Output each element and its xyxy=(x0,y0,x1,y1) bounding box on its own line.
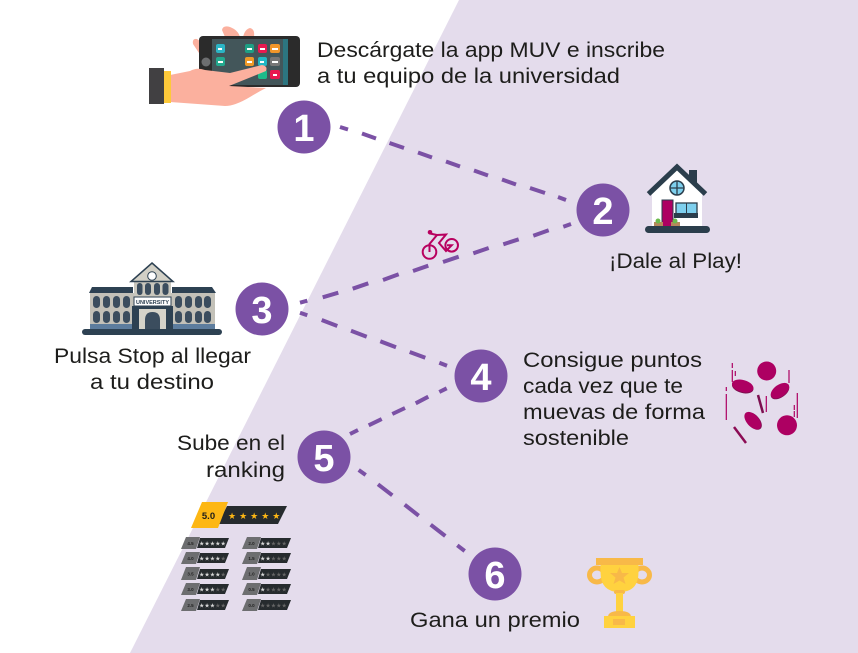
top rating 5.0: ★★★★★ xyxy=(228,511,283,521)
text: step 5: Sube en el xyxy=(177,431,285,455)
ratings left column: ★★★★★ xyxy=(199,586,226,594)
text: step 1 xyxy=(317,38,665,88)
step 4 badge xyxy=(454,350,508,402)
step 2 badge xyxy=(576,184,630,236)
icon: house xyxy=(645,167,710,233)
ranking chart xyxy=(181,502,291,611)
text: step 4: sostenible xyxy=(523,426,629,450)
icon: university building: UNIVERSITY xyxy=(136,300,169,306)
text: step 6: Gana un premio xyxy=(410,608,580,632)
dashed connector 3 to 4 xyxy=(300,313,447,366)
step 4 badge: 4 xyxy=(470,357,492,399)
text: step 2: ¡Dale al Play! xyxy=(609,249,742,273)
text: step 3 xyxy=(54,344,251,394)
step 6 badge xyxy=(468,548,522,600)
dashed connector 5 to 6 xyxy=(359,470,465,551)
ratings right column: ★★★★★ xyxy=(260,586,287,594)
ratings left column: 4.5 xyxy=(187,541,194,546)
icon: falling coins xyxy=(726,362,797,443)
ratings right column: 0.5 xyxy=(248,587,255,592)
ratings right column: ★★★★★ xyxy=(260,602,287,610)
text: step 4: cada vez que te xyxy=(523,374,683,398)
step 1 badge xyxy=(278,100,330,154)
ratings right column: 2.0 xyxy=(248,541,255,546)
text: step 3: Pulsa Stop al llegar xyxy=(54,344,251,368)
top rating 5.0 xyxy=(191,502,287,528)
ratings left column: ★★★★★ xyxy=(199,572,226,578)
step 2 badge: 2 xyxy=(592,191,614,233)
text: step 4: Consigue puntos xyxy=(523,348,702,372)
ratings right column: 1.0 xyxy=(248,572,255,576)
step 3 badge: 3 xyxy=(251,290,273,332)
ratings left column: ★★★★★ xyxy=(199,602,226,610)
dashed connector 4 to 5 xyxy=(350,388,447,434)
step 1 badge: 1 xyxy=(293,108,315,150)
top rating 5.0: 5.0 xyxy=(202,511,215,522)
step 3 badge xyxy=(236,282,288,336)
icon: university building xyxy=(82,263,222,335)
ratings left column: 3.5 xyxy=(187,572,194,576)
text: step 3: a tu destino xyxy=(90,370,214,394)
text: step 4 xyxy=(523,348,705,450)
ratings left column: ★★★★★ xyxy=(199,556,226,562)
ratings left column xyxy=(181,537,229,611)
text: step 1: Descárgate la app MUV e inscribe xyxy=(317,38,665,62)
ratings left column: 4.0 xyxy=(187,556,194,561)
step 6 badge: 6 xyxy=(484,555,506,597)
step 5 badge xyxy=(298,430,350,484)
ratings right column: 1.5 xyxy=(248,556,255,561)
step 5 badge: 5 xyxy=(313,438,335,480)
ratings right column: 0.0 xyxy=(248,603,255,608)
ratings left column: ★★★★★ xyxy=(199,540,226,548)
text: step 5 xyxy=(177,431,285,482)
icon: hand holding phone xyxy=(149,26,300,106)
ratings right column xyxy=(242,537,291,611)
icon: trophy xyxy=(590,558,650,628)
ratings right column: ★★★★★ xyxy=(260,540,287,548)
ratings right column: ★★★★★ xyxy=(260,572,287,578)
dashed connector 2 to 3 xyxy=(300,224,571,303)
text: step 1: a tu equipo de la universidad xyxy=(317,64,620,88)
text: step 5: ranking xyxy=(206,458,285,482)
ratings left column: 3.0 xyxy=(187,587,194,592)
text: step 4: muevas de forma xyxy=(523,400,705,424)
icon: bicycle xyxy=(423,230,458,259)
dashed connector 1 to 2 xyxy=(340,127,566,200)
ratings left column: 2.5 xyxy=(187,603,194,608)
ratings right column: ★★★★★ xyxy=(260,556,287,562)
